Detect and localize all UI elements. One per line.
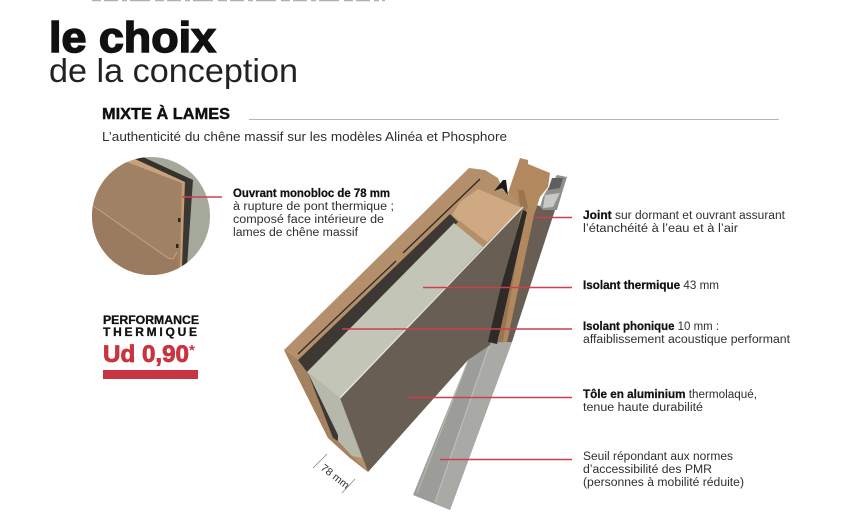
grooves (298, 179, 480, 354)
text: ouvrant monobloc: composé face intérieure de (233, 214, 384, 226)
text: ouvrant monobloc: lames de chêne massif (233, 227, 359, 239)
title (49, 14, 298, 89)
text: ouvrant monobloc: Ouvrant monobloc de 78 mm (233, 188, 390, 200)
door cross-section illustration (284, 158, 567, 510)
performance badge: Ud 0,90 (103, 341, 189, 368)
red leader lines (342, 218, 572, 460)
label: seuil: Seuil répondant aux normes (583, 451, 733, 463)
subtitle: L’authenticité du chêne massif sur les modèles Alinéa et Phosphore (102, 129, 507, 144)
metal threshold (413, 338, 512, 510)
label: joint: l’étanchéité à l’eau et à l’air (583, 223, 738, 235)
brown aluminium face (340, 208, 522, 472)
black seal slot (494, 180, 508, 195)
door oak side (284, 168, 522, 472)
frame (498, 158, 567, 342)
text: ouvrant monobloc: à rupture de pont thermique ; (233, 201, 394, 213)
label: seuil (583, 451, 744, 489)
label: tôle aluminium: Tôle en aluminium thermolaqué, (583, 389, 757, 401)
label: seuil: (personnes à mobilité réduite) (583, 477, 744, 489)
dimension: 78 mm: 78 mm (318, 462, 352, 492)
detail circle: oak leaf (90, 155, 212, 280)
title: le choix (49, 14, 216, 62)
dark phonic layer (298, 214, 458, 372)
seal (488, 210, 527, 344)
door oak lower strip (284, 350, 368, 472)
label: isolant phonique (583, 321, 791, 346)
thermal insulation (307, 223, 483, 398)
dark side strip (308, 373, 338, 441)
performance badge: THERMIQUE (103, 325, 197, 339)
dimension: 78 mm (313, 454, 355, 493)
performance badge (103, 313, 199, 379)
title: de la conception (49, 52, 298, 89)
label: joint (583, 210, 786, 235)
red leader: ouvrant (182, 196, 222, 198)
section heading: MIXTE À LAMES (102, 104, 230, 123)
label: isolant phonique: Isolant phonique 10 mm : (583, 321, 719, 333)
label: isolant thermique: Isolant thermique 43 mm (583, 280, 719, 292)
insulation side face (308, 373, 362, 458)
label: joint: Joint sur dormant et ouvrant assurant (583, 210, 786, 222)
label: tôle aluminium (583, 389, 757, 414)
text: ouvrant monobloc (233, 188, 394, 239)
performance badge: PERFORMANCE (103, 313, 199, 327)
label: tôle aluminium: tenue haute durabilité (583, 402, 703, 414)
label: seuil: d’accessibilité des PMR (583, 464, 712, 476)
wood block (452, 189, 522, 242)
performance badge: * (189, 342, 195, 359)
label: isolant phonique: affaiblissement acoustique performant (583, 334, 791, 346)
